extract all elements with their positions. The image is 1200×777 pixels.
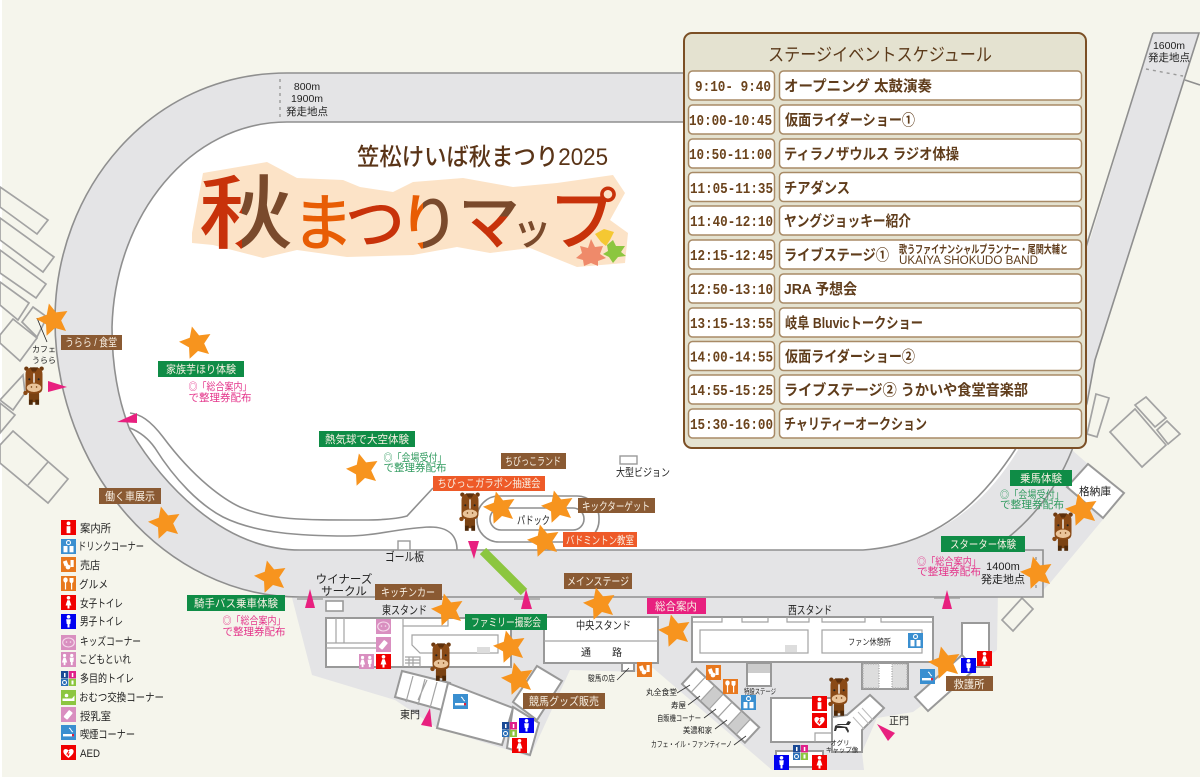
- legend: drink: ドリンクコーナー: [78, 540, 144, 553]
- row 3: [688, 139, 1082, 168]
- row 8: 岐阜 Bluvicトークショー: [785, 314, 923, 332]
- cafe urara label: カフェ: [32, 345, 56, 354]
- legend: women: [61, 595, 123, 610]
- label: main stage: メインステージ: [567, 576, 629, 588]
- title: main heading: ッ: [512, 209, 552, 253]
- legend: women: 女子トイレ: [80, 597, 123, 610]
- star: starter: [1017, 553, 1056, 590]
- event labels: [61, 335, 1072, 709]
- row 7: [688, 274, 1082, 303]
- icon: food row shop: [706, 665, 721, 680]
- legend: smoking: 喫煙コーナー: [80, 728, 135, 741]
- main gate building: [771, 698, 832, 742]
- star: badminton: [524, 521, 563, 558]
- label: jockey bus: [187, 595, 285, 611]
- row 3: 10:50-11:00: [689, 147, 772, 164]
- flag: east crossing: [305, 589, 315, 608]
- row 8: [688, 308, 1082, 337]
- west stand label: 西スタンド: [788, 604, 832, 617]
- passage label: 路: [612, 646, 622, 659]
- food row: [682, 669, 759, 743]
- food shop names: 美濃和家: [683, 725, 712, 735]
- icon: west smoking: [920, 669, 935, 684]
- label: balloon: [319, 431, 415, 447]
- label: working vehicles: [99, 488, 161, 504]
- label: kick target: [578, 498, 655, 513]
- icon: food row drink: [741, 695, 756, 710]
- schedule heading: ステージイベントスケジュール: [768, 45, 992, 65]
- icon: main gate men: [774, 755, 789, 770]
- food shop names: [646, 686, 776, 749]
- star: garapon: [480, 488, 519, 525]
- track lines: [55, 33, 1200, 597]
- title: main heading: プ: [549, 183, 617, 259]
- oguri cap statue label: オグリ: [830, 738, 850, 747]
- fan lounge label: ファン休憩所: [848, 637, 891, 647]
- start point label 1400m: [981, 561, 1025, 586]
- rescue building: [915, 623, 989, 711]
- note: starter ticket: ◎「総合案内」: [917, 555, 981, 568]
- star: information: [655, 611, 694, 648]
- note: potato ticket: で整理券配布: [188, 391, 252, 404]
- flag: inner turn: [117, 413, 137, 423]
- flag: centre crossing: [521, 589, 532, 609]
- label: kitchen car: キッチンカー: [381, 586, 435, 599]
- flag: main gate: [877, 724, 895, 741]
- row 1: 9:10- 9:40: [695, 79, 771, 96]
- legend: diaper: おむつ交換コーナー: [79, 691, 164, 704]
- label: information: [647, 598, 706, 614]
- legend: child toilet: こどもといれ: [79, 653, 131, 666]
- gate toilets block: [776, 751, 823, 767]
- row 9: 14:00-14:55: [690, 350, 773, 366]
- food row leader lines: [677, 685, 746, 745]
- label: riding: 乗馬体験: [1020, 471, 1062, 485]
- label: starter: [941, 536, 1025, 552]
- mascot: riding: [1052, 513, 1073, 551]
- goal board: [398, 541, 410, 550]
- row 6: ライブステージ①: [784, 246, 889, 264]
- legend: child toilet: [61, 652, 131, 667]
- star: main stage: [580, 584, 619, 621]
- label: information: 総合案内: [655, 599, 697, 613]
- central stand: [544, 617, 658, 680]
- note: riding ticket: [1000, 488, 1064, 511]
- note: bus ticket: [222, 614, 286, 638]
- neighbouring buildings: left: [0, 187, 68, 503]
- note: starter ticket: で整理券配布: [917, 565, 981, 578]
- start point label 1400m: 発走地点: [981, 572, 1025, 586]
- legend: gourmet: グルメ: [79, 577, 108, 591]
- mascot: paddock: [459, 493, 480, 531]
- start point label 1600m: [1148, 40, 1190, 64]
- note: starter ticket: [917, 555, 981, 578]
- paddock label: パドック: [517, 514, 550, 527]
- note: bus ticket: ◎「総合案内」: [222, 614, 286, 627]
- icon: east gate men: [519, 718, 534, 733]
- title: subtitle: 笠松けいば秋まつり2025: [357, 144, 608, 171]
- label: kick target: キックターゲット: [582, 500, 650, 513]
- row 4: チアダンス: [784, 179, 850, 197]
- row 11: 15:30-16:00: [690, 417, 773, 434]
- racetrack surface: [55, 33, 1199, 597]
- row 7: 12:50-13:10: [690, 282, 773, 299]
- icon: main gate AED: [812, 713, 827, 728]
- winners circle: [326, 601, 343, 611]
- legend: information: [61, 520, 111, 535]
- food shop names: 寿屋: [671, 700, 686, 710]
- winners circle label: ウイナーズ: [316, 572, 372, 586]
- legend: kids: [61, 634, 141, 650]
- east stand label: 東スタンド: [382, 604, 427, 617]
- legend: men: [61, 614, 123, 629]
- winners circle label: サークル: [321, 585, 367, 598]
- mascot: urara: [23, 367, 44, 405]
- note: bus ticket: で整理券配布: [222, 625, 286, 638]
- row 5: 11:40-12:10: [690, 214, 773, 231]
- row 10: [688, 375, 1082, 404]
- row 9: [688, 342, 1082, 370]
- east stand: [326, 618, 511, 667]
- grounds apron: [290, 450, 1105, 770]
- row 6: UKAIYA SHOKUDO BAND: [899, 255, 1038, 267]
- hangar: [1067, 464, 1124, 518]
- row 4: [688, 172, 1082, 202]
- label: goods: 競馬グッズ販売: [529, 694, 599, 708]
- row 2: 仮面ライダーショー①: [785, 111, 915, 129]
- label: family photo: ファミリー撮影会: [471, 615, 541, 629]
- legend: drink: [61, 539, 144, 554]
- row 10: 14:55-15:25: [690, 383, 773, 400]
- row 2: [688, 105, 1082, 134]
- mascot: main gate: [828, 678, 849, 716]
- row 6: 歌うファイナンシャルプランナー・尾関大輔と: [899, 242, 1068, 256]
- special stage: [747, 663, 771, 686]
- infield: [112, 122, 1018, 550]
- star: potato: [176, 323, 215, 360]
- cafe urara label: [32, 345, 56, 365]
- start point label 800m 1900m: 発走地点: [286, 105, 328, 118]
- row 1: [688, 71, 1082, 100]
- label: balloon: 熱気球で大空体験: [325, 432, 409, 446]
- legend: AED: AED: [80, 748, 100, 760]
- shop label: 駿馬の店: [588, 673, 615, 683]
- label: kitchen car: [375, 584, 442, 600]
- east gate buildings: [395, 666, 562, 755]
- note: riding ticket: ◎「会場受付」: [1000, 488, 1064, 501]
- passage label: 通: [581, 647, 591, 659]
- flag: west crossing: [942, 590, 952, 609]
- icon: east gate smoking: [453, 694, 468, 709]
- east gate label: 東門: [400, 708, 420, 721]
- central stand label: 中央スタンド: [576, 619, 631, 632]
- flag: west turn: [48, 381, 67, 392]
- oguri cap statue label: キャップ像: [826, 745, 859, 754]
- main gate label: 正門: [889, 715, 909, 727]
- row 9: 仮面ライダーショー②: [785, 348, 915, 366]
- note: potato ticket: [188, 380, 252, 404]
- legend: kids: キッズコーナー: [80, 634, 141, 648]
- oguri cap statue label: [826, 738, 859, 754]
- neighbouring buildings: right: [1002, 394, 1180, 631]
- label: potato digging: [158, 361, 244, 377]
- legend: information: 案内所: [80, 521, 111, 535]
- label: urara: うらら / 食堂: [65, 336, 117, 349]
- row 6: 12:15-12:45: [690, 248, 773, 265]
- legend: gourmet: [61, 576, 108, 591]
- star: balloon: [343, 450, 382, 487]
- label: goods: [523, 693, 605, 709]
- winners circle label: [316, 572, 372, 598]
- star: family photo: [490, 627, 529, 664]
- label: family photo: [465, 614, 547, 630]
- icon: fan lounge drink: [908, 633, 923, 648]
- start point label 1400m: 1400m: [986, 561, 1020, 573]
- mascot: east stand: [430, 643, 451, 681]
- label: first aid: 救護所: [954, 677, 984, 691]
- note: balloon ticket: [384, 451, 446, 474]
- label: potato digging: 家族芋ほり体験: [166, 362, 236, 376]
- label: riding: [1010, 470, 1072, 486]
- schedule panel: [684, 33, 1086, 448]
- row 7: JRA 予想会: [784, 281, 857, 298]
- paddock inner ring: [490, 508, 584, 530]
- note: balloon ticket: で整理券配布: [384, 461, 446, 474]
- label: garapon: ちびっこガラポン抽選会: [438, 476, 540, 490]
- star: kitchen car: [428, 590, 467, 627]
- legend: shop: [61, 557, 100, 572]
- row 1: オープニング 太鼓演奏: [784, 77, 932, 95]
- maple leaves: [576, 229, 626, 266]
- food shop names: 自販機コーナー: [657, 713, 701, 723]
- icon: east stand child toilet: [359, 654, 374, 669]
- big vision label: 大型ビジョン: [616, 465, 670, 479]
- row 10: ライブステージ② うかいや食堂音楽部: [784, 381, 1028, 399]
- goal board label: ゴール板: [385, 549, 424, 564]
- gate structure: [832, 695, 884, 752]
- title background blob: [192, 162, 628, 267]
- title: main heading: マ: [458, 189, 520, 258]
- star: kick target: [538, 487, 577, 524]
- icon: main gate women: [812, 755, 827, 770]
- food shop names: 特設ステージ: [744, 686, 776, 696]
- icon: east gate women: [512, 738, 527, 753]
- title: main heading: ま: [292, 190, 354, 259]
- icon: food row gourmet: [723, 679, 738, 694]
- start dashes: [280, 69, 1183, 592]
- stairs: [862, 663, 908, 689]
- passage label: [581, 646, 622, 659]
- legend: multi toilet: [61, 671, 134, 686]
- label: main stage: [564, 573, 632, 589]
- start point label 800m 1900m: [286, 81, 328, 118]
- flag: paddock: [468, 541, 479, 559]
- note: balloon ticket: ◎「会場受付」: [384, 451, 446, 464]
- gate stripes: [853, 708, 873, 729]
- row 2: 10:00-10:45: [689, 113, 772, 130]
- start point label 1600m: 1600m: [1153, 40, 1185, 52]
- icon: east stand women: [376, 654, 391, 669]
- food shop names: カフェ・イル・ファンティーノ: [651, 740, 732, 749]
- icon: east stand kids: [376, 619, 391, 634]
- label: kids land: ちびっこランド: [505, 455, 561, 468]
- icon: main gate info: [812, 696, 827, 711]
- note: potato ticket: ◎「総合案内」: [188, 380, 252, 393]
- note: riding ticket: で整理券配布: [1000, 498, 1064, 511]
- label: starter: スターター体験: [950, 537, 1016, 551]
- label: jockey bus: 騎手バス乗車体験: [194, 596, 278, 610]
- icon: main gate multi toilet: [793, 745, 808, 760]
- label: badminton: バドミントン教室: [566, 534, 634, 547]
- row 8: 13:15-13:55: [690, 316, 773, 333]
- legend: multi toilet: 多目的トイレ: [80, 671, 134, 685]
- legend: smoking: [61, 725, 135, 741]
- title: main heading: [199, 170, 617, 259]
- row 11: [688, 409, 1082, 438]
- flag: east gate: [421, 708, 432, 727]
- row 11: チャリティーオークション: [784, 416, 927, 433]
- row 6: [688, 240, 1082, 269]
- cafe urara label: うらら: [32, 356, 56, 365]
- paddock outer ring: [477, 496, 599, 542]
- label: badminton: [563, 532, 637, 547]
- statue horse: [834, 721, 851, 733]
- row 3: ティラノザウルス ラジオ体操: [784, 145, 959, 163]
- row 4: 11:05-11:35: [690, 181, 773, 198]
- star: goods: [498, 659, 537, 696]
- title: main heading: 秋: [199, 170, 293, 259]
- left edge strip: [0, 0, 2, 777]
- label: first aid: [946, 676, 993, 691]
- label: working vehicles: 働く車展示: [105, 489, 155, 503]
- icon: east stand nursing: [376, 637, 391, 652]
- icon: rescue women: [977, 651, 992, 666]
- title: main heading: り: [398, 190, 460, 259]
- legend: diaper: [61, 690, 164, 705]
- hangar label: 格納庫: [1079, 484, 1111, 498]
- legend: nursing: [61, 707, 111, 723]
- big vision: [620, 456, 637, 464]
- title: main heading: つ: [345, 191, 405, 258]
- start point label 800m 1900m: 800m: [294, 81, 320, 93]
- star: urara: [33, 300, 72, 337]
- cafe urara leader: [37, 318, 47, 342]
- star: jockey bus: [251, 557, 290, 594]
- legend: men: 男子トイレ: [80, 615, 123, 628]
- star: vehicles: [145, 503, 184, 540]
- start point label 1600m: 発走地点: [1148, 51, 1190, 64]
- west stand: [692, 617, 933, 662]
- legend: [61, 520, 164, 760]
- crossing bars: [297, 598, 960, 599]
- legend: shop: 売店: [80, 559, 100, 572]
- label: kids land: [501, 453, 566, 469]
- row 5: [688, 206, 1082, 235]
- label: urara: [61, 335, 122, 350]
- food shop names: 丸全食堂: [646, 687, 677, 697]
- star: riding: [1062, 490, 1101, 527]
- row 5: ヤングジョッキー紹介: [784, 212, 911, 230]
- legend: nursing: 授乳室: [80, 709, 111, 723]
- icon: central shop: [637, 662, 652, 677]
- icon: east gate multi toilet: [502, 722, 517, 737]
- green path: [483, 551, 524, 592]
- icon: rescue men: [961, 658, 976, 673]
- start point label 800m 1900m: 1900m: [291, 93, 323, 105]
- star: first aid: [925, 643, 964, 680]
- legend: AED: [61, 745, 100, 760]
